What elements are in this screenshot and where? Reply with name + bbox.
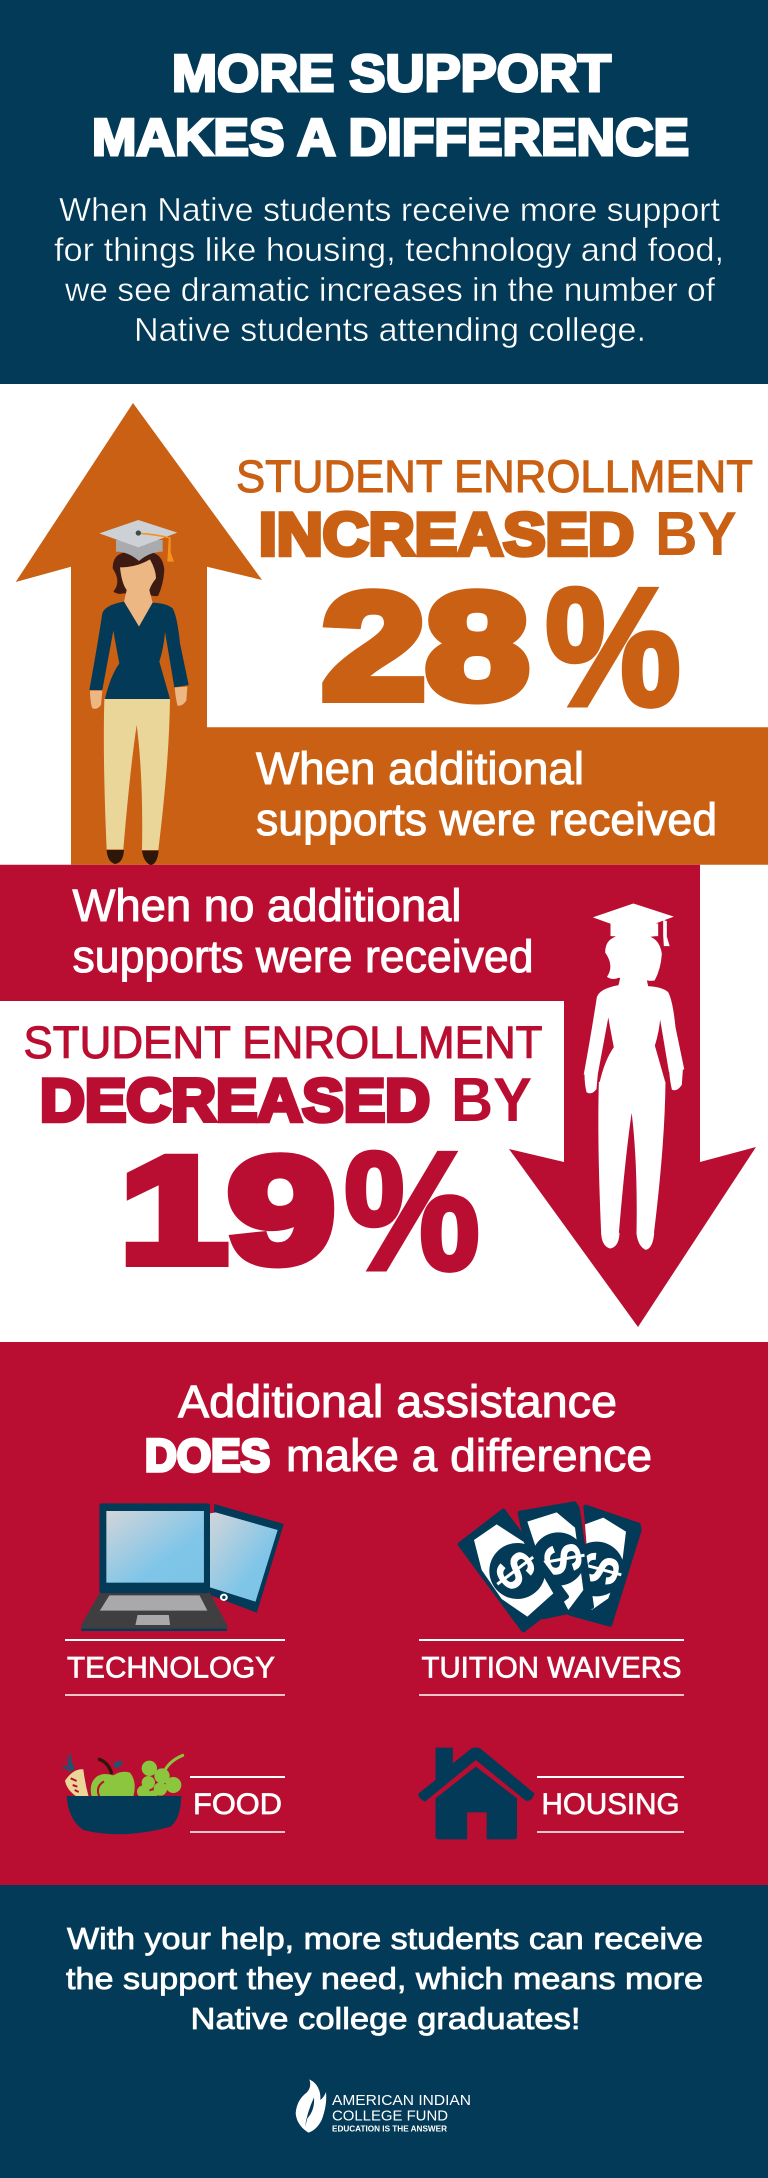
label: tuition waivers: TUITION WAIVERS — [422, 1652, 682, 1684]
heading: student enrollment increased by — [236, 451, 753, 569]
panel: additional assistance — [0, 1342, 768, 1885]
intro text: When Native students receive more support — [59, 191, 720, 228]
text: when additional supports — [256, 743, 717, 845]
text: logo wordmark — [332, 2093, 471, 2134]
text: logo wordmark: EDUCATION IS THE ANSWER — [332, 2125, 447, 2134]
title: MAKES A DIFFERENCE — [92, 109, 689, 167]
text: when additional supports: supports were received — [256, 794, 717, 845]
text: when additional supports: When additional — [256, 743, 584, 794]
figure: graduate woman — [89, 520, 189, 865]
logo: american indian college fund — [296, 2079, 471, 2134]
intro text: Native students attending college. — [134, 311, 646, 348]
label: food: FOOD — [193, 1788, 282, 1821]
call to action text: the support they need, which means more — [66, 1961, 703, 1996]
arrow: down — [0, 865, 756, 1327]
text: when no additional supports — [72, 880, 534, 982]
panel: footer — [0, 1885, 768, 2178]
figure: graduate silhouette — [584, 904, 684, 1249]
heading: does make a difference — [145, 1376, 652, 1481]
heading: student enrollment decreased by: DECREASED — [40, 1067, 430, 1134]
heading: does make a difference: Additional assistance — [178, 1376, 617, 1427]
panel: header — [0, 0, 768, 384]
stat: 19%: 19 — [120, 1126, 335, 1294]
text: logo wordmark: COLLEGE FUND — [332, 2109, 448, 2125]
stat: 28%: % — [545, 553, 681, 741]
title: MORE SUPPORT — [172, 45, 611, 103]
call to action text: With your help, more students can receive — [67, 1921, 703, 1956]
heading: does make a difference: make a difference — [286, 1430, 652, 1481]
call to action text — [66, 1921, 703, 2036]
heading: student enrollment decreased by: STUDENT ENROLLMENT — [24, 1017, 542, 1068]
heading: does make a difference: DOES — [145, 1430, 270, 1481]
title — [92, 45, 689, 167]
arrow: up — [16, 403, 768, 865]
label: food — [190, 1776, 285, 1833]
icon: laptop and tablet — [81, 1503, 284, 1631]
label: housing: HOUSING — [542, 1788, 680, 1821]
intro text: for things like housing, technology and food, — [54, 231, 724, 268]
intro text — [54, 191, 724, 348]
text: when no additional supports: supports were received — [72, 931, 534, 982]
icon: money bills — [460, 1504, 639, 1630]
panel: enrollment increased — [16, 403, 768, 865]
panel: enrollment decreased — [0, 865, 756, 1327]
text: logo wordmark: AMERICAN INDIAN — [332, 2093, 471, 2109]
heading: student enrollment decreased by — [24, 1017, 542, 1135]
stat: 19%: % — [344, 1117, 480, 1305]
icon: money bills: $ — [530, 1538, 596, 1579]
icon: fruit bowl — [61, 1752, 183, 1834]
icon: money bills: $ — [566, 1546, 634, 1592]
heading: student enrollment increased by: INCREASED — [259, 501, 634, 568]
icon: house — [418, 1747, 534, 1839]
heading: student enrollment increased by: BY — [655, 500, 737, 569]
heading: student enrollment decreased by: BY — [451, 1066, 532, 1135]
intro text: we see dramatic increases in the number of — [64, 271, 716, 308]
icon: money bills: $ — [482, 1539, 550, 1601]
stat: 28%: 28 — [322, 562, 529, 730]
text: when no additional supports: When no additional — [72, 880, 462, 931]
icon: flame feather — [296, 2079, 326, 2133]
heading: student enrollment increased by: STUDENT ENROLLMENT — [236, 451, 753, 502]
call to action text: Native college graduates! — [190, 2001, 580, 2036]
label: technology: TECHNOLOGY — [67, 1652, 275, 1684]
